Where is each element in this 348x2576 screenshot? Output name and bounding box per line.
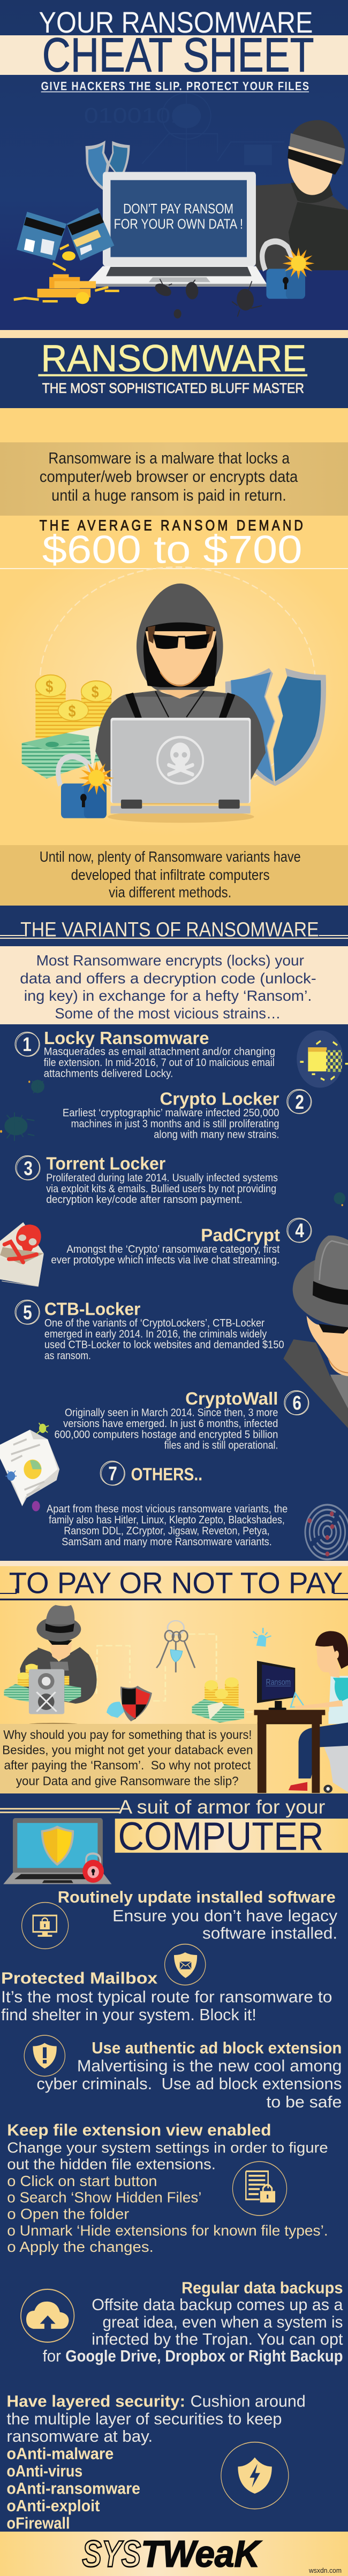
tagline: GIVE HACKERS THE SLIP. PROTECT YOUR FILES bbox=[41, 80, 309, 93]
definition band bbox=[0, 442, 348, 516]
number badge 6 bbox=[284, 1391, 309, 1415]
protection section part one bbox=[0, 1796, 348, 2139]
tip: regular data backups: Google Drive, Dropbox or Right Backup bbox=[65, 2347, 343, 2365]
icon: infected document bbox=[0, 1423, 59, 1512]
icon: broken credit cards bbox=[17, 208, 114, 260]
number badge 5 bbox=[15, 1300, 40, 1324]
file extension instructions bbox=[7, 2140, 328, 2256]
file extension instructions: o Click on start button bbox=[7, 2173, 157, 2190]
icon: alarm light bbox=[253, 1628, 271, 1647]
icon: secure laptop bbox=[3, 1818, 112, 1884]
logo: systweak: SYS bbox=[82, 2533, 141, 2574]
variant 5: ctb-locker: CTB-Locker bbox=[44, 1300, 141, 1319]
average demand value: $600 to $700 bbox=[42, 528, 302, 572]
number badge 4: 4 bbox=[295, 1220, 304, 1242]
variant 5: ctb-locker: used CTB-Locker to lock websites and demanded $150 bbox=[44, 1339, 284, 1351]
navy protection background bbox=[0, 1793, 348, 2532]
title: your ransomware: YOUR RANSOMWARE bbox=[39, 6, 313, 39]
variant 7: others: SamSam and many more Ransomware variants. bbox=[62, 1536, 272, 1547]
laptop bbox=[87, 172, 266, 287]
variant 7: others: Apart from these most vicious ransomware variants, the bbox=[47, 1503, 288, 1515]
variants intro text: Most Ransomware encrypts (locks) your bbox=[36, 953, 304, 969]
number badge 3: 3 bbox=[24, 1158, 33, 1180]
variants intro text: Some of the most vicious strains… bbox=[55, 1006, 281, 1022]
pay section background bbox=[0, 1566, 348, 1793]
number badge 3 bbox=[16, 1156, 40, 1180]
variant 3: torrent locker: Torrent Locker bbox=[46, 1154, 166, 1174]
cream divider bbox=[0, 1561, 348, 1566]
pay question panel bbox=[0, 1724, 258, 1793]
variant 5: ctb-locker: One of the variants of ‘CryptoLockers’, CTB-Locker bbox=[44, 1317, 264, 1329]
tip: protected mailbox bbox=[1, 1944, 332, 2024]
laptop screen message: DON'T PAY RANSOM bbox=[123, 201, 233, 216]
variant 4: padcrypt: PadCrypt bbox=[201, 1226, 280, 1245]
pay question text: Besides, you might not get your databack even bbox=[2, 1743, 253, 1757]
tip: layered security: the multiple layer of securities to keep bbox=[6, 2410, 282, 2428]
tip: ad block extension bbox=[24, 2035, 342, 2111]
closing explanation text bbox=[40, 849, 301, 901]
definition text: computer/web browser or encrypts data bbox=[40, 468, 298, 486]
navy ransomware heading band bbox=[0, 338, 348, 408]
closing explanation text: developed that infiltrate computers bbox=[71, 867, 270, 883]
variant 6: cryptowall: Originally seen in March 2014. Since then, 3 more bbox=[65, 1407, 278, 1419]
title: cheat sheet: CHEAT SHEET bbox=[42, 29, 314, 82]
number badge 7: 7 bbox=[108, 1463, 117, 1485]
illustration glow bbox=[0, 569, 348, 845]
ransomware heading bbox=[38, 337, 307, 396]
icon: red and black shield with lock bbox=[107, 1686, 152, 1721]
layered security list: oAnti-ransomware bbox=[6, 2479, 140, 2497]
dashed connectors bbox=[96, 1634, 253, 1712]
icon: broken shield bbox=[86, 141, 130, 191]
icon: spy with fedora bbox=[283, 1236, 348, 1428]
pay question text: Why should you pay for something that is yours! bbox=[3, 1728, 252, 1742]
variant 5: ctb-locker: emerged in early 2014. In 2016, the criminals widely bbox=[44, 1328, 267, 1340]
file extension instructions: o Apply the changes. bbox=[7, 2239, 154, 2256]
icon: padlock with burst bbox=[262, 241, 314, 299]
icon: laptop with skull bbox=[108, 718, 254, 823]
icon: spy with safe and cash bbox=[4, 1605, 97, 1714]
variant 3: torrent locker: via exploit kits & emails. Bullied users by not providing bbox=[46, 1183, 276, 1194]
icon: hooded hacker bbox=[95, 584, 266, 783]
variant 1: locky ransomware: file extension. In mid-2016, 7 out of 10 malicious email bbox=[44, 1056, 275, 1068]
tip: layered security bbox=[6, 2392, 306, 2532]
layered security list bbox=[6, 2444, 140, 2532]
desk, legs and chair bbox=[254, 1712, 348, 1793]
variant 6: cryptowall: 600,000 computers hostage and encrypted 5 billion bbox=[55, 1429, 278, 1440]
number badge 2: 2 bbox=[295, 1092, 304, 1114]
navy variants heading band bbox=[0, 906, 348, 946]
variants intro text: ing key) in exchange for a hefty ‘Ransom’. bbox=[24, 988, 312, 1005]
cream title band bbox=[0, 35, 348, 75]
variant 5: ctb-locker: as ransom. bbox=[44, 1350, 91, 1361]
monitor showing ransom: Ransom bbox=[266, 1677, 291, 1687]
tip: regular data backups: great idea, even when a system is bbox=[103, 2313, 343, 2331]
variant 3: torrent locker bbox=[16, 1154, 278, 1205]
icon: fingerprint bbox=[305, 1505, 348, 1559]
icon: cash stack bbox=[22, 726, 100, 779]
monitor showing ransom bbox=[257, 1661, 304, 1710]
variant 7: others bbox=[47, 1461, 288, 1547]
variants intro text bbox=[20, 953, 316, 1022]
yellow explanation background bbox=[0, 408, 348, 906]
variant 7: others: family also has Hitler, Linux, Klepto Zepto, Blackshades, bbox=[49, 1514, 285, 1525]
number badge 1 bbox=[15, 1032, 40, 1056]
variant 6: cryptowall bbox=[55, 1389, 309, 1451]
heading: a suit of armor for your bbox=[0, 1796, 325, 1818]
subheading: THE MOST SOPHISTICATED BLUFF MASTER bbox=[42, 381, 304, 396]
pay question text bbox=[2, 1728, 253, 1788]
tip: regular data backups: Regular data backups bbox=[181, 2279, 343, 2297]
variant 1: locky ransomware: Locky Ransomware bbox=[44, 1029, 209, 1048]
tip: ad block extension: to be safe bbox=[266, 2092, 342, 2111]
layered security list: oAnti-exploit bbox=[6, 2497, 100, 2515]
number badge 4 bbox=[287, 1218, 312, 1243]
hero section (title, tagline, illustration) bbox=[14, 6, 348, 318]
tip: ad block extension: cyber criminals. Use ad block extensions bbox=[36, 2075, 342, 2093]
icon: coin stacks: $ bbox=[46, 677, 53, 696]
tip: regular data backups bbox=[21, 2279, 343, 2365]
white rule bbox=[0, 568, 348, 569]
icon: coins and cash bbox=[192, 1677, 244, 1723]
variant 1: locky ransomware bbox=[15, 1029, 275, 1079]
tip: layered security: Cushion around bbox=[191, 2392, 306, 2410]
variant 7: others: OTHERS.. bbox=[131, 1465, 202, 1484]
protection section part two bbox=[6, 2140, 343, 2532]
icon: keys bbox=[156, 1621, 195, 1673]
number badge 1: 1 bbox=[22, 1034, 32, 1056]
tip: protected mailbox: Protected Mailbox bbox=[1, 1969, 158, 1987]
variant 4: padcrypt: Amongst the ‘Crypto’ ransomware category, first bbox=[66, 1243, 279, 1255]
variant 2: crypto locker: along with many new strains. bbox=[154, 1129, 279, 1140]
cream variants intro band bbox=[0, 946, 348, 1024]
variants intro text: data and offers a decryption code (unlock- bbox=[20, 970, 316, 987]
variants section part two bbox=[0, 1300, 348, 1559]
icon: bugs bbox=[0, 1079, 345, 1206]
variant 6: cryptowall: files and is still operational. bbox=[164, 1439, 278, 1451]
variant 4: padcrypt: ever prototype which infects via live chat streaming. bbox=[51, 1254, 279, 1266]
variant 3: torrent locker: Proliferated during late 2014. Usually infected systems bbox=[46, 1172, 278, 1184]
icon: coin stacks bbox=[35, 675, 111, 738]
icon: corrupted folder bbox=[297, 1031, 348, 1088]
icon: locked monitor bbox=[22, 1903, 69, 1949]
bottom of pay section bbox=[0, 1712, 348, 1793]
variant 4: padcrypt bbox=[51, 1218, 312, 1266]
icon: thief in beanie bbox=[255, 120, 348, 270]
footer background bbox=[0, 2532, 348, 2576]
definition text bbox=[40, 449, 298, 504]
ground shadow bbox=[28, 1723, 79, 1726]
icon: broken shield bbox=[225, 668, 326, 786]
tip: routinely update: Ensure you don’t have legacy bbox=[112, 1906, 337, 1925]
header background bbox=[0, 0, 348, 330]
variant 3: torrent locker: decryption key/code after ransom payment. bbox=[46, 1193, 243, 1205]
tip: protected mailbox: It’s the most typical route for ransomware to bbox=[1, 1988, 332, 2006]
logo: systweak: TWeaK bbox=[141, 2533, 262, 2574]
icon: bugs bbox=[154, 279, 262, 318]
heading: ransomware: RANSOMWARE bbox=[41, 337, 306, 379]
variant 2: crypto locker: Earliest ‘cryptographic’ malware infected 250,000 bbox=[63, 1107, 279, 1119]
file extension instructions: o Open the folder bbox=[7, 2206, 130, 2222]
tip: routinely update bbox=[22, 1888, 337, 1949]
heading: variants of ransomware: THE VARIANTS OF RANSOMWARE bbox=[20, 918, 319, 941]
icon: padlock with burst bbox=[58, 756, 114, 818]
tip: ad block extension: Use authentic ad block extension bbox=[92, 2038, 342, 2057]
explanation section bbox=[22, 449, 326, 823]
heading: a suit of armor for your: A suit of armor for your bbox=[119, 1796, 325, 1818]
tip: regular data backups: infected by the Trojan. You can opt bbox=[92, 2330, 343, 2348]
watermark: wsxdn.com bbox=[308, 2566, 342, 2574]
variant 5: ctb-locker bbox=[15, 1300, 284, 1361]
laptop screen message bbox=[114, 201, 243, 232]
average demand label: THE AVERAGE RANSOM DEMAND bbox=[40, 517, 303, 534]
variant 6: cryptowall: versions have emerged. In just 6 months, infected bbox=[63, 1417, 278, 1429]
tip: regular data backups: for bbox=[43, 2347, 61, 2365]
variant 6: cryptowall: CryptoWall bbox=[185, 1389, 278, 1409]
icon: coin stacks: $ bbox=[69, 702, 76, 720]
variant 7: others: Ransom DDL, ZCryptor, Jigsaw, Reveton, Petya, bbox=[64, 1525, 270, 1537]
pay question text: your Data and give Ransomware the slip? bbox=[16, 1774, 239, 1788]
tip: ad block extension: Malvertising is the new cool among bbox=[77, 2057, 342, 2075]
number badge 6: 6 bbox=[292, 1393, 301, 1414]
file extension instructions: Change your system settings in order to figure bbox=[7, 2140, 328, 2156]
tip: routinely update: software installed. bbox=[202, 1924, 337, 1942]
number badge 2 bbox=[287, 1090, 312, 1114]
tip heading: keep file extension view enabled: Keep file extension view enabled bbox=[7, 2121, 271, 2139]
variant 2: crypto locker: Crypto Locker bbox=[160, 1090, 279, 1109]
layered security list: oAnti-malware bbox=[6, 2444, 114, 2463]
tip: routinely update: Routinely update installed software bbox=[58, 1888, 336, 1906]
file extension instructions: out the hidden file extensions. bbox=[7, 2156, 216, 2173]
icon: envelope with red skull bbox=[0, 1222, 44, 1286]
faint dashed ring bbox=[40, 567, 315, 796]
icon: locked document bbox=[232, 2161, 287, 2215]
tip: layered security: ransomware at bay. bbox=[6, 2427, 153, 2445]
pay or not to pay illustration bbox=[0, 1567, 348, 1723]
navy variants background bbox=[0, 1024, 348, 1560]
tip: layered security: Have layered security: bbox=[6, 2392, 185, 2410]
variants section part one bbox=[0, 849, 348, 1266]
tip: protected mailbox: find shelter in your system. Block it! bbox=[1, 2006, 256, 2024]
variant 1: locky ransomware: attachments delivered Locky. bbox=[44, 1068, 173, 1079]
variant 2: crypto locker: machines in just 3 months and is still proliferating bbox=[71, 1118, 279, 1130]
bottom band bbox=[0, 845, 348, 906]
faint circuit background: 01001010 bbox=[84, 103, 199, 127]
tip: regular data backups: Offsite data backup comes up as a bbox=[92, 2295, 343, 2314]
heading: computer: COMPUTER bbox=[118, 1815, 323, 1859]
icon: warning shield bbox=[24, 2035, 65, 2076]
file extension instructions: o Unmark ‘Hide extensions for known file types’. bbox=[7, 2222, 328, 2239]
icon: gold coins pile bbox=[14, 245, 119, 304]
variant 1: locky ransomware: Masquerades as email attachment and/or changing bbox=[44, 1046, 275, 1057]
closing explanation text: via different methods. bbox=[109, 884, 231, 901]
faint circuit background bbox=[84, 93, 284, 175]
icon: cloud upload bbox=[21, 2289, 74, 2342]
icon: coin stacks: $ bbox=[92, 683, 99, 701]
number badge 7 bbox=[100, 1461, 125, 1485]
laptop screen message: FOR YOUR OWN DATA ! bbox=[114, 216, 243, 232]
file extension instructions: o Search ‘Show Hidden Files’ bbox=[7, 2189, 201, 2206]
heading underline bbox=[38, 374, 307, 377]
icon: mail shield bbox=[165, 1944, 206, 1985]
definition text: Ransomware is a malware that locks a bbox=[48, 449, 290, 467]
cream divider bbox=[0, 330, 348, 338]
layered security list: oAnti-virus bbox=[6, 2462, 82, 2480]
logo: systweak bbox=[82, 2533, 262, 2574]
icon: bolt shield bbox=[221, 2442, 289, 2509]
variant 2: crypto locker bbox=[63, 1090, 312, 1140]
pay question text: after paying the ‘Ransom’. So why not protect bbox=[4, 1758, 251, 1773]
number badge 5: 5 bbox=[23, 1302, 32, 1324]
closing explanation text: Until now, plenty of Ransomware variants have bbox=[40, 849, 301, 865]
worried user bbox=[254, 1631, 348, 1722]
layered security list: oFirewall bbox=[6, 2514, 70, 2532]
definition text: until a huge ransom is paid in return. bbox=[51, 487, 286, 504]
